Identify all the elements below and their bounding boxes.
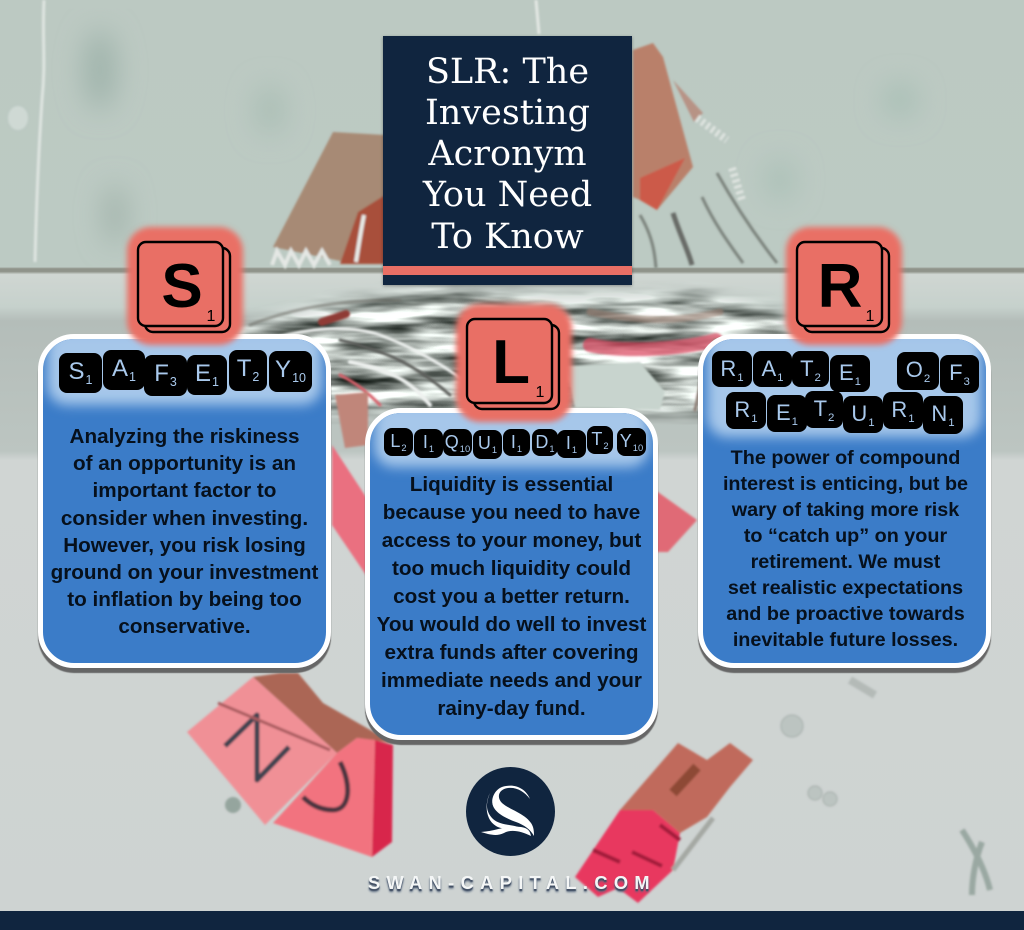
splash accents	[240, 300, 720, 410]
panel: liquidity	[365, 408, 658, 740]
icon: L letter tile: 1	[536, 384, 545, 401]
word tiles: SAFETY: F3	[154, 360, 177, 389]
rate of return description: set realistic expectations	[728, 577, 963, 599]
word tiles: RATE OF RETURN: U1	[851, 401, 875, 429]
safety description: of an opportunity is an	[73, 452, 296, 475]
icon: R letter tile	[704, 223, 985, 668]
word tiles: RATE OF RETURN: E1	[839, 360, 861, 388]
safety description	[51, 425, 318, 638]
word tiles: SAFETY: S1	[69, 358, 92, 387]
tile mid right	[655, 490, 697, 552]
tile upper left	[273, 132, 385, 262]
safety description: However, you risk losing	[63, 534, 306, 557]
word tiles: RATE OF RETURN: R1	[720, 356, 744, 384]
word tiles: LIQUIDITY	[384, 426, 646, 459]
word tiles: RATE OF RETURN	[712, 351, 979, 434]
word tiles: LIQUIDITY: I1	[423, 432, 434, 454]
liquidity description	[377, 473, 646, 720]
title heading: To Know	[431, 217, 584, 257]
safety description: consider when investing.	[61, 507, 308, 530]
rate of return description: retirement. We must	[751, 551, 940, 573]
rate of return description: to “catch up” on your	[744, 525, 947, 547]
icon: S letter tile: 1	[207, 308, 216, 325]
rate of return description: and be proactive towards	[726, 603, 965, 625]
panel: safety	[38, 334, 331, 668]
word tiles: LIQUIDITY: I1	[566, 433, 577, 455]
safety description: important factor to	[93, 479, 276, 502]
icon: S letter tile: S	[161, 252, 203, 321]
tile upper right	[633, 43, 693, 210]
word tiles: RATE OF RETURN: N1	[931, 401, 955, 429]
streaks on glass	[35, 0, 44, 262]
liquidity description: extra funds after covering	[384, 641, 639, 664]
word tiles: LIQUIDITY: T2	[591, 429, 609, 451]
tile lower right	[575, 743, 753, 903]
title block	[383, 36, 632, 285]
word tiles: SAFETY: A1	[112, 355, 136, 384]
website url: SWAN-CAPITAL.COM	[368, 873, 656, 893]
title heading: Investing	[425, 93, 590, 133]
word tiles: RATE OF RETURN: F3	[949, 360, 970, 388]
tile lower left with letters	[187, 673, 393, 857]
word tiles: LIQUIDITY: L2	[390, 431, 407, 453]
word tiles: LIQUIDITY: Y10	[620, 431, 643, 453]
liquidity description: Liquidity is essential	[410, 473, 613, 496]
liquidity description: You would do well to invest	[377, 613, 646, 636]
rate of return description: wary of taking more risk	[732, 499, 959, 521]
rate of return description: interest is enticing, but be	[723, 473, 968, 495]
safety description: Analyzing the riskiness	[70, 425, 299, 448]
liquidity description: rainy-day fund.	[437, 697, 586, 720]
title heading: SLR: The	[426, 52, 589, 92]
word tiles: SAFETY	[59, 350, 312, 396]
word tiles: RATE OF RETURN: T2	[800, 356, 821, 384]
word tiles: LIQUIDITY: Q10	[445, 432, 470, 454]
liquidity description: too much liquidity could	[392, 557, 631, 580]
word tiles: LIQUIDITY: I1	[511, 432, 522, 454]
word tiles: SAFETY: T2	[237, 355, 259, 384]
word tiles: SAFETY: Y10	[275, 356, 306, 385]
liquidity description: immediate needs and your	[381, 669, 642, 692]
rate of return description: The power of compound	[731, 447, 960, 469]
footer bar	[0, 911, 1024, 930]
word tiles: RATE OF RETURN: A1	[761, 356, 784, 384]
icon: L letter tile	[366, 300, 576, 826]
icon: R letter tile: R	[818, 252, 862, 321]
word tiles: RATE OF RETURN: O2	[906, 357, 930, 385]
safety description: ground on your investment	[51, 561, 318, 584]
safety description: conservative.	[118, 615, 251, 638]
icon: L letter tile: L	[492, 328, 530, 397]
word tiles: LIQUIDITY: D1	[535, 432, 555, 454]
title heading	[422, 52, 592, 257]
word tiles: RATE OF RETURN: E1	[776, 400, 798, 428]
water drops	[781, 715, 837, 806]
word tiles: RATE OF RETURN: T2	[814, 396, 834, 424]
icon: R letter tile: 1	[866, 308, 875, 325]
safety description: to inflation by being too	[67, 588, 302, 611]
icon: S letter tile	[44, 223, 320, 668]
liquidity description: access to your money, but	[382, 529, 641, 552]
word tiles: RATE OF RETURN: R1	[891, 397, 915, 425]
word tiles: SAFETY: E1	[195, 360, 219, 389]
liquidity description: cost you a better return.	[393, 585, 630, 608]
word tiles: LIQUIDITY: U1	[478, 433, 497, 455]
panel: rate of return	[698, 334, 991, 668]
title accent bar	[383, 266, 632, 275]
tile mid left	[335, 392, 368, 448]
icon: swan logo	[466, 767, 555, 856]
title heading: You Need	[423, 175, 592, 215]
rate of return description	[723, 447, 968, 651]
liquidity description: because you need to have	[383, 501, 640, 524]
word tiles: RATE OF RETURN: R1	[734, 397, 758, 425]
rate of return description: inevitable future losses.	[733, 629, 958, 651]
splash texture	[238, 285, 790, 424]
title heading: Acronym	[428, 134, 587, 174]
